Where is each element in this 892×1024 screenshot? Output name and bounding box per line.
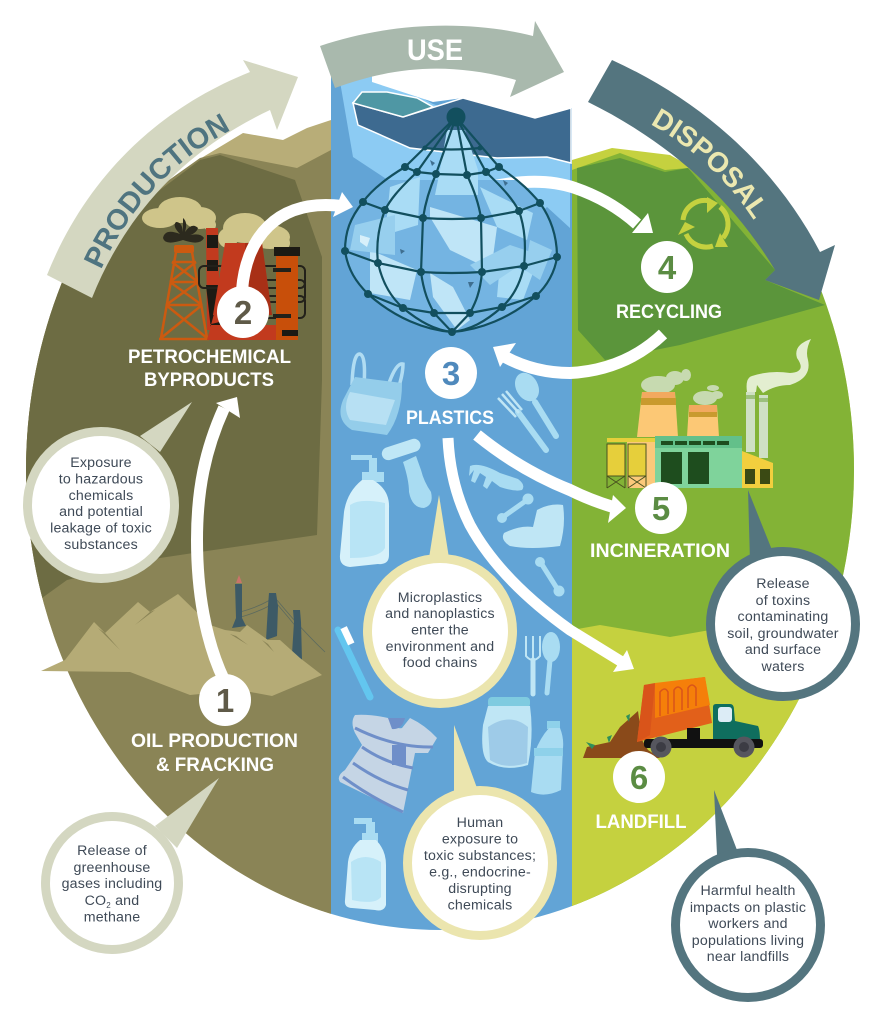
net knots <box>341 108 561 336</box>
icon: fork and spoon two <box>526 632 560 694</box>
callout: human exposure: exposure to <box>442 832 518 848</box>
callout: exposure: to hazardous <box>59 472 143 488</box>
yellow annex <box>742 451 773 488</box>
label: use: USE <box>407 34 463 67</box>
landfill dirt <box>583 711 660 758</box>
callout: release of toxins: waters <box>760 659 804 675</box>
arrow: 1 to 2 <box>197 397 240 680</box>
step 1 <box>131 674 298 776</box>
step 5 <box>590 482 730 562</box>
callout: exposure: and potential <box>59 504 143 520</box>
derrick <box>159 252 209 339</box>
label: oil production: & FRACKING <box>156 755 274 776</box>
callout: human exposure: chemicals <box>448 898 512 914</box>
step 1: 1 <box>216 682 234 719</box>
panel: use blue column <box>331 70 572 940</box>
callout: microplastics: and nanoplastics <box>385 606 495 622</box>
label: disposal: DISPOSAL <box>652 108 764 220</box>
callout: greenhouse gases: 2 <box>106 901 111 910</box>
icon: refinery <box>142 197 305 340</box>
main building <box>655 436 742 488</box>
callout: microplastics: food chains <box>403 655 477 671</box>
stack <box>206 228 220 330</box>
callout: release of toxins: and surface <box>745 642 821 658</box>
icon: collection net <box>341 108 561 336</box>
arrow: 4 to 3 <box>493 334 663 373</box>
callout: release of toxins: Release <box>756 576 810 592</box>
callout: human exposure <box>408 725 552 936</box>
callout: release of toxins: soil, groundwater <box>727 626 839 642</box>
icon: swab ends <box>497 494 534 523</box>
callout: greenhouse gases: greenhouse <box>74 860 150 876</box>
callout: human exposure: disrupting <box>448 881 512 897</box>
icon: pump bottle <box>340 455 389 567</box>
icon: swab two <box>535 557 564 596</box>
stacks <box>746 392 768 458</box>
callout: health impacts: Harmful health <box>700 883 796 899</box>
icon: incinerator <box>607 339 811 488</box>
smoke <box>747 339 811 393</box>
step 6: 6 <box>630 759 648 796</box>
callout: exposure: leakage of toxic <box>50 520 152 536</box>
step 4: 4 <box>658 249 677 286</box>
callout: release of toxins: contaminating <box>738 609 828 625</box>
label: plastics: PLASTICS <box>406 408 494 429</box>
rig three <box>292 610 302 660</box>
callout: human exposure: toxic substances; <box>424 848 536 864</box>
cooling tower <box>213 243 272 315</box>
label: oil production: OIL PRODUCTION <box>131 731 298 752</box>
icon: pump bottle two <box>345 818 386 910</box>
callout: greenhouse gases: gases including <box>62 876 162 892</box>
icon: comb <box>469 465 523 491</box>
callout: health impacts: impacts on plastic <box>690 900 806 916</box>
label: incineration: INCINERATION <box>590 541 730 562</box>
label: landfill: LANDFILL <box>596 812 687 833</box>
pipes <box>199 266 305 318</box>
callout: human exposure: Human <box>457 815 503 831</box>
step 6 <box>596 751 687 833</box>
cooling towers <box>607 369 723 488</box>
label: petrochemical byproducts: BYPRODUCTS <box>144 370 274 391</box>
mountains <box>41 594 322 696</box>
callout: human exposure: e.g., endocrine- <box>429 864 531 880</box>
callout: health impacts: populations living <box>692 933 804 949</box>
callout: health impacts: near landfills <box>707 949 789 965</box>
ship deck <box>353 92 433 117</box>
step 3 <box>406 347 494 429</box>
callout: microplastics: enter the <box>411 622 469 638</box>
panel: production terrain <box>26 120 331 914</box>
arrow: 3 to 4 <box>490 182 653 233</box>
icon: recycling <box>678 197 728 247</box>
label: recycling: RECYCLING <box>616 302 722 323</box>
callout: greenhouse gases: Release of <box>77 843 147 859</box>
step 3: 3 <box>442 355 460 392</box>
panel: plastic items <box>338 354 564 910</box>
captured plastics <box>345 130 560 335</box>
icon: toothbrush <box>338 626 370 697</box>
icon: oil rigs <box>232 575 325 660</box>
icon: sock <box>503 505 564 548</box>
label: petrochemical byproducts: PETROCHEMICAL <box>128 347 291 368</box>
icon: swab <box>503 500 527 517</box>
callout: release of toxins: of toxins <box>756 593 810 609</box>
callout: health impacts: workers and <box>707 916 788 932</box>
arrow: 3 to 6 <box>448 438 634 672</box>
callout: health impacts <box>676 790 820 998</box>
ship hull <box>353 98 571 163</box>
arrow: production <box>47 60 298 298</box>
callout: greenhouse gases: methane <box>84 910 140 926</box>
callout: exposure: Exposure <box>70 455 132 471</box>
icon: fork and spoon <box>498 369 556 450</box>
icon: razor <box>380 437 432 508</box>
icon: dump truck <box>583 677 763 758</box>
callout: greenhouse gases <box>46 778 219 950</box>
callout: greenhouse gases: CO <box>85 893 139 910</box>
silos <box>607 444 646 488</box>
arrow: disposal <box>588 60 835 300</box>
rig one <box>232 584 246 628</box>
callout: exposure: substances <box>64 537 138 553</box>
icon: shirt <box>339 715 437 813</box>
step 2 <box>128 286 291 391</box>
net lines <box>345 117 557 332</box>
arrow: 3 to 5 <box>477 435 626 523</box>
oil spray <box>163 218 204 243</box>
truck bed <box>637 677 712 742</box>
step 2: 2 <box>234 294 252 331</box>
icon: jar <box>482 697 532 768</box>
rig two <box>266 593 278 640</box>
truck cab <box>713 704 760 741</box>
column <box>276 247 298 340</box>
callout: exposure: chemicals <box>69 488 133 504</box>
icon: plastic bag <box>340 354 403 435</box>
arrow: use <box>320 21 564 97</box>
truck chassis <box>644 728 763 758</box>
panel: disposal green column <box>572 148 854 906</box>
callout: release of toxins <box>710 490 856 696</box>
callout: microplastics: environment and <box>386 639 494 655</box>
callout: microplastics: Microplastics <box>398 590 482 606</box>
step 5: 5 <box>652 490 670 527</box>
white gap above ship <box>372 60 572 118</box>
arrow: 2 to 3 <box>242 192 353 290</box>
label: production: PRODUCTION <box>84 113 230 268</box>
step 4 <box>616 241 722 323</box>
callout: greenhouse gases: and <box>111 893 139 909</box>
callout: exposure <box>28 402 192 578</box>
clouds <box>142 197 290 250</box>
callout: microplastics <box>368 495 512 704</box>
icon: bottle <box>531 721 563 795</box>
